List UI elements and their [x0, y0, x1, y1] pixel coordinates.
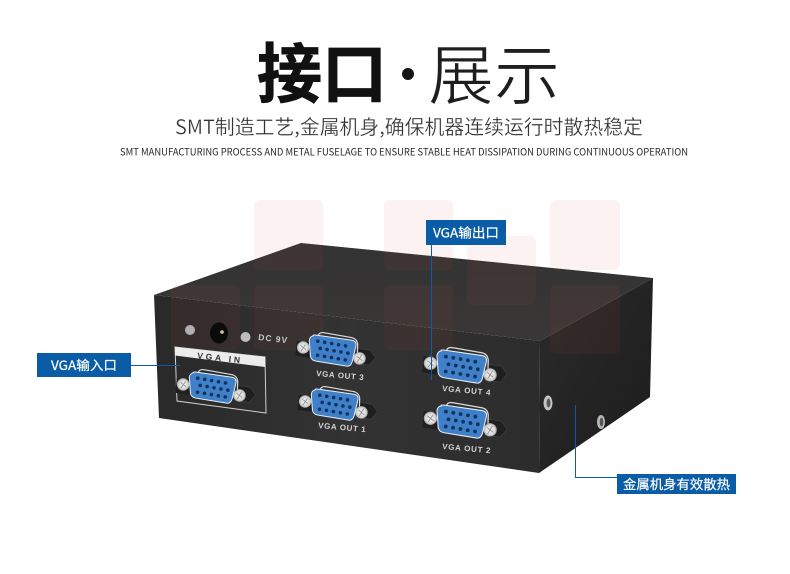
connector: VGA OUT 1 — [297, 384, 379, 423]
label: VGA OUT 2: VGA OUT 2 — [442, 442, 492, 455]
indicator screw — [185, 325, 195, 335]
DC power jack — [210, 322, 228, 344]
device top face — [154, 243, 653, 341]
callout: VGA input: VGA输入口 — [51, 355, 117, 374]
label: DC 9V: DC 9V — [258, 332, 289, 345]
connector: VGA IN — [175, 367, 257, 406]
callout: metal body heat dissipation: 金属机身有效散热 — [623, 474, 730, 493]
device ports and labels — [175, 322, 605, 455]
connector: VGA OUT 2 — [422, 400, 509, 441]
label: VGA OUT 1: VGA OUT 1 — [318, 421, 367, 434]
side screw far — [597, 415, 605, 429]
subtitle: English: SMT MANUFACTURING PROCESS AND METAL FUSELAGE TO ENSURE STABLE HEAT DISSIPATION DURING CONTINUOUS OPERATION — [120, 144, 688, 158]
decorative pink squares — [171, 200, 620, 354]
title — [257, 22, 560, 119]
callout: VGA input — [37, 353, 180, 377]
device body — [154, 243, 653, 473]
connector: VGA OUT 3 — [295, 330, 377, 369]
device front face — [154, 295, 540, 473]
indicator LED — [240, 332, 250, 342]
title: 接口 — [257, 22, 387, 116]
callout: metal body heat dissipation — [576, 405, 736, 494]
VGA IN panel — [175, 347, 266, 413]
VGA IN panel: VGA IN — [197, 351, 243, 365]
subtitle: Chinese: SMT制造工艺,金属机身,确保机器连续运行时散热稳定 — [175, 111, 643, 140]
label: VGA OUT 3: VGA OUT 3 — [316, 369, 365, 382]
label: VGA OUT 4: VGA OUT 4 — [442, 384, 492, 397]
device right side face — [539, 278, 653, 473]
connector: VGA OUT 4 — [422, 345, 509, 386]
side screw near — [544, 396, 552, 410]
callout: VGA output — [426, 220, 506, 380]
title: 展示 — [428, 23, 560, 119]
callout: VGA output: VGA输出口 — [433, 222, 499, 242]
